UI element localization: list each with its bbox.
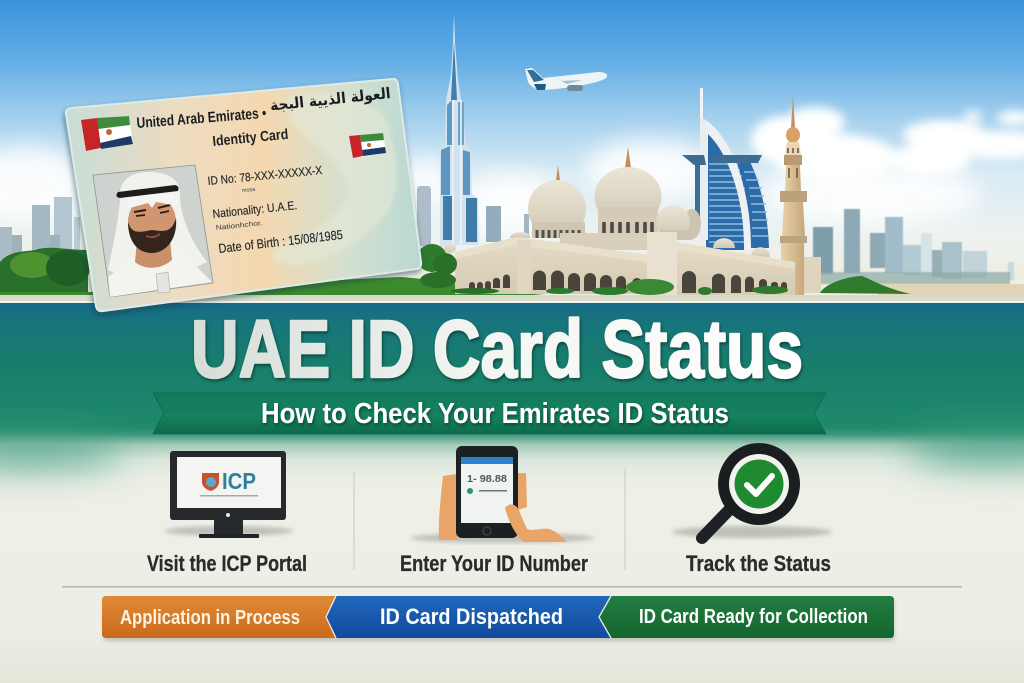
stage: ready for collection: ID Card Ready for Collection <box>639 606 868 628</box>
dome: left <box>528 165 586 238</box>
wall: right wing <box>677 245 795 295</box>
label: Track the Status <box>686 551 831 576</box>
ID number: ID No: 78-XXX-XXXXX-X <box>207 163 323 188</box>
green haze at band edges <box>0 430 1024 468</box>
step 3: track status <box>672 443 832 576</box>
mosque <box>444 147 821 295</box>
card heading: Arabic: العولة الذيية البجة <box>269 84 391 115</box>
card heading: English: United Arab Emirates • <box>136 105 267 132</box>
dome: small right <box>656 205 701 240</box>
step 1: ICP portal <box>147 451 307 576</box>
card heading: Identity Card: Identity Card <box>212 127 289 150</box>
phone reading: 1- 98.88 <box>467 473 507 485</box>
sea and green band <box>0 303 1024 503</box>
stage: application in process <box>102 596 336 638</box>
portrait photo <box>93 165 213 297</box>
small ID caption: mosa <box>242 187 257 194</box>
sky background <box>0 0 1024 300</box>
agal band <box>116 185 179 198</box>
horizontal divider <box>62 586 962 588</box>
status bar shadow <box>104 600 894 641</box>
card map watermark <box>272 94 397 265</box>
stage: application in process: Application in Process <box>120 607 300 629</box>
shoreline <box>0 295 1024 303</box>
stage: card dispatched <box>326 596 611 638</box>
trees and bushes <box>0 244 910 295</box>
dome: centre <box>594 147 662 235</box>
subtitle ribbon <box>153 393 826 434</box>
wall: central block <box>647 232 677 295</box>
nationality: Nationality: U.A.E. <box>212 198 298 221</box>
flag: left <box>81 116 133 151</box>
title: UAE ID Card Status <box>191 304 803 395</box>
label: Enter Your ID Number <box>400 551 588 576</box>
distant towers by Burj <box>417 186 529 246</box>
wall: rear terrace <box>560 233 655 250</box>
ICP wordmark: ICP <box>222 468 256 494</box>
collar <box>156 272 170 293</box>
lower pale background <box>0 500 1024 683</box>
airplane <box>525 68 607 91</box>
clouds <box>0 107 1024 237</box>
date of birth: Date of Birth : 15/08/1985 <box>218 227 344 256</box>
subtitle: How to Check Your Emirates ID Status <box>261 398 729 430</box>
eyebrows <box>134 205 170 212</box>
shoulders <box>108 250 212 297</box>
icon: monitor <box>165 451 293 538</box>
eyes <box>136 211 169 216</box>
scarf fold <box>125 192 180 208</box>
column dividers <box>354 468 625 570</box>
beard <box>128 218 176 253</box>
identity card <box>66 79 421 311</box>
step 2: ID number <box>400 446 594 576</box>
stage separators <box>326 596 611 638</box>
right skyline <box>813 209 1014 284</box>
Burj Khalifa tower <box>440 13 479 248</box>
card body <box>66 79 421 311</box>
face <box>128 195 176 249</box>
nationality caption: Nationhchor. <box>215 220 263 232</box>
headscarf <box>108 172 207 280</box>
label: Visit the ICP Portal <box>147 551 307 576</box>
stage: card dispatched: ID Card Dispatched <box>380 604 563 629</box>
wall: end block <box>804 257 821 293</box>
sand strip <box>878 284 1024 296</box>
icon: magnifier with check <box>672 443 832 538</box>
waterline highlight <box>0 301 1024 303</box>
left skyline <box>0 197 80 272</box>
wall: left wing <box>455 237 648 294</box>
Burj Al Arab hotel <box>682 88 769 250</box>
icon: hand and phone <box>410 446 594 543</box>
small domes <box>444 232 770 257</box>
minaret <box>780 95 807 295</box>
stage: ready for collection <box>599 596 894 638</box>
flag: right <box>349 133 386 158</box>
icon: ICP logo <box>202 473 219 491</box>
neck <box>135 240 172 268</box>
mouth <box>146 234 160 237</box>
arches <box>469 270 787 293</box>
grass <box>0 277 560 296</box>
status bar <box>102 596 894 641</box>
